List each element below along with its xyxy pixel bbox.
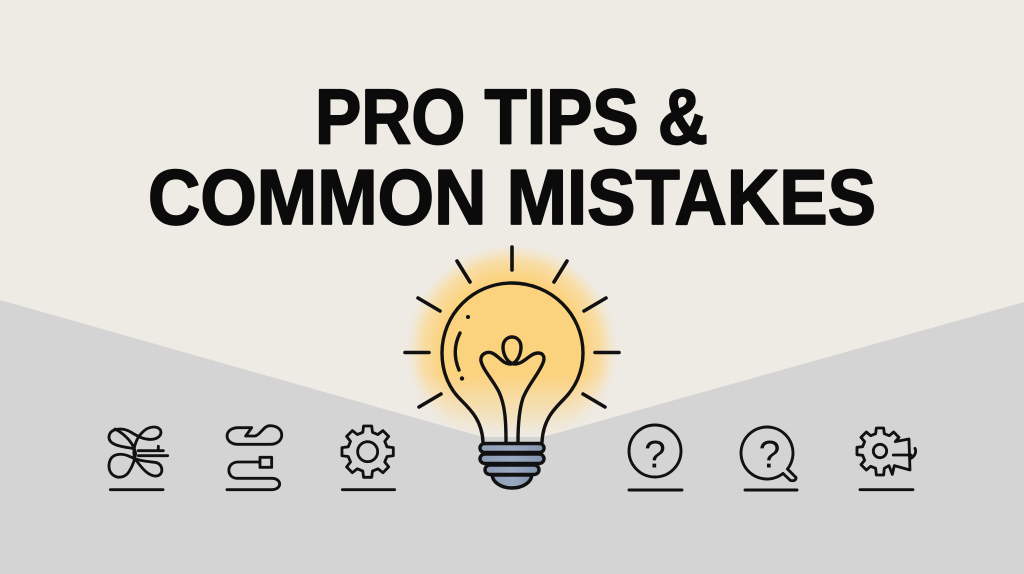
icon: question mark in magnifier [741, 427, 797, 490]
bulb highlight [455, 333, 460, 370]
background: grey lower wedge [0, 300, 1024, 574]
title [148, 73, 876, 241]
bulb glass outline [442, 283, 583, 442]
light bulb glow [409, 247, 615, 432]
icon: question mark in circle [629, 425, 682, 490]
icon: broken gear [857, 428, 916, 490]
icon: question mark in circle: ? [644, 434, 666, 476]
bulb rays [405, 247, 619, 407]
bulb filament [481, 337, 544, 442]
title: PRO TIPS & [315, 73, 708, 161]
bulb screw base [480, 444, 544, 488]
icon: coiled wire with plug [227, 426, 282, 490]
title: COMMON MISTAKES [148, 153, 876, 241]
icon: gear [342, 426, 395, 490]
icon: light bulb [405, 247, 619, 488]
icon: question mark in magnifier: ? [759, 434, 780, 476]
icon: tangled cable [109, 427, 168, 490]
